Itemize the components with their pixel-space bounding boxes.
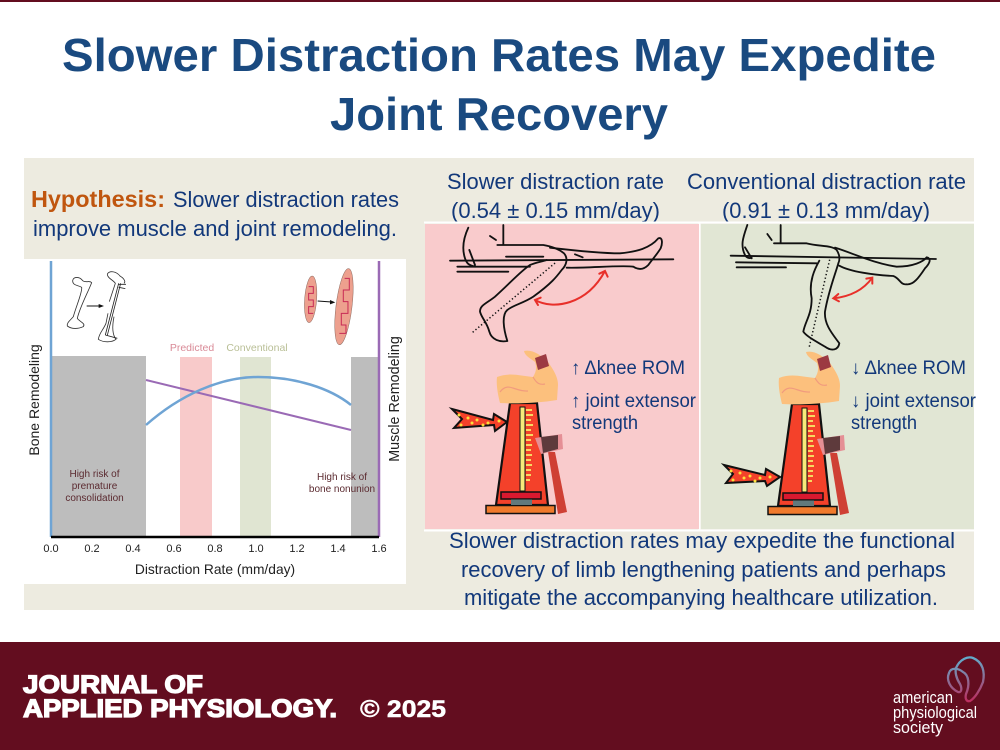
risk labels: High risk of xyxy=(317,472,367,483)
x axis ticks: 0.8 xyxy=(207,543,223,555)
x axis ticks: 0.6 xyxy=(166,543,182,555)
title xyxy=(62,29,936,140)
journal name xyxy=(23,671,337,723)
icon: muscle lengthening xyxy=(303,268,357,346)
heading: slower rate xyxy=(447,169,664,223)
title: Slower Distraction Rates May Expedite xyxy=(62,29,936,81)
heading: conventional rate: (0.91 ± 0.13 mm/day) xyxy=(722,198,930,223)
logo: american physiological society: american xyxy=(893,688,953,707)
conclusion text: recovery of limb lengthening patients and perhaps xyxy=(461,557,946,582)
panel: conventional rate xyxy=(701,224,977,529)
leg diagram xyxy=(731,225,936,350)
title: Joint Recovery xyxy=(330,88,668,140)
outcomes: strength xyxy=(851,413,917,434)
x axis ticks: 0.0 xyxy=(43,543,59,555)
conclusion text: Slower distraction rates may expedite the functional xyxy=(449,528,955,553)
icon: bone lengthening xyxy=(67,272,126,342)
journal name: JOURNAL OF xyxy=(23,671,203,699)
logo: american physiological society xyxy=(893,657,984,737)
x axis ticks: 0.2 xyxy=(84,543,100,555)
y axis title: muscle: Muscle Remodeling xyxy=(387,336,403,462)
hypothesis text: Hypothesis: xyxy=(31,186,165,212)
hypothesis text xyxy=(31,186,399,241)
band labels xyxy=(170,342,288,354)
heading: slower rate: (0.54 ± 0.15 mm/day) xyxy=(451,198,660,223)
risk labels: High risk of xyxy=(69,469,120,480)
conventional band xyxy=(240,357,271,537)
heading: conventional rate xyxy=(687,169,966,223)
conclusion text xyxy=(449,528,955,610)
x axis ticks: 0.4 xyxy=(125,543,141,555)
x axis ticks: 1.2 xyxy=(289,543,305,555)
band labels: Predicted xyxy=(170,342,214,354)
hypothesis text: improve muscle and joint remodeling. xyxy=(33,216,397,241)
outcomes: ↑ Δknee ROM xyxy=(571,358,685,379)
outcomes: strength xyxy=(572,413,638,434)
panel dividers xyxy=(424,222,974,530)
panel: remodeling chart xyxy=(24,259,406,584)
x axis ticks: 1.4 xyxy=(330,543,346,555)
bone remodeling curve xyxy=(146,377,351,425)
footer band xyxy=(0,642,1000,750)
panel: background xyxy=(24,158,974,610)
axes xyxy=(50,261,52,537)
panel: slower rate xyxy=(425,224,699,529)
hypothesis text: Slower distraction rates xyxy=(173,187,399,212)
leg diagram xyxy=(450,225,673,341)
outcomes: ↓ Δknee ROM xyxy=(851,358,966,379)
band labels: Conventional xyxy=(226,342,288,354)
x axis title: Distraction Rate (mm/day) xyxy=(135,562,295,577)
copyright: © 2025 xyxy=(360,696,446,723)
y axis title: bone: Bone Remodeling xyxy=(26,344,42,456)
logo: american physiological society: physiological xyxy=(893,703,977,722)
top bar xyxy=(0,0,1000,2)
heading: slower rate: Slower distraction rate xyxy=(447,169,664,194)
risk labels: bone nonunion xyxy=(309,484,375,495)
x axis ticks xyxy=(43,543,387,555)
conclusion text: mitigate the accompanying healthcare utilization. xyxy=(464,585,938,610)
risk labels: premature xyxy=(72,481,118,492)
risk labels xyxy=(65,469,375,504)
muscle remodeling line xyxy=(146,380,351,430)
strength dynamometer xyxy=(452,351,567,514)
outcomes: ↓ joint extensor xyxy=(851,391,977,412)
heading: conventional rate: Conventional distraction rate xyxy=(687,169,966,194)
risk zone: premature consolidation xyxy=(51,356,146,537)
risk zone: bone nonunion xyxy=(351,357,379,537)
strength dynamometer xyxy=(724,352,849,515)
risk labels: consolidation xyxy=(65,493,124,504)
logo: american physiological society: society xyxy=(893,718,943,737)
x axis ticks: 1.6 xyxy=(371,543,387,555)
predicted band xyxy=(180,357,212,537)
outcomes xyxy=(571,358,697,434)
outcomes xyxy=(851,358,977,434)
journal name: APPLIED PHYSIOLOGY. xyxy=(23,695,337,723)
outcomes: ↑ joint extensor xyxy=(571,391,697,412)
x axis ticks: 1.0 xyxy=(248,543,264,555)
